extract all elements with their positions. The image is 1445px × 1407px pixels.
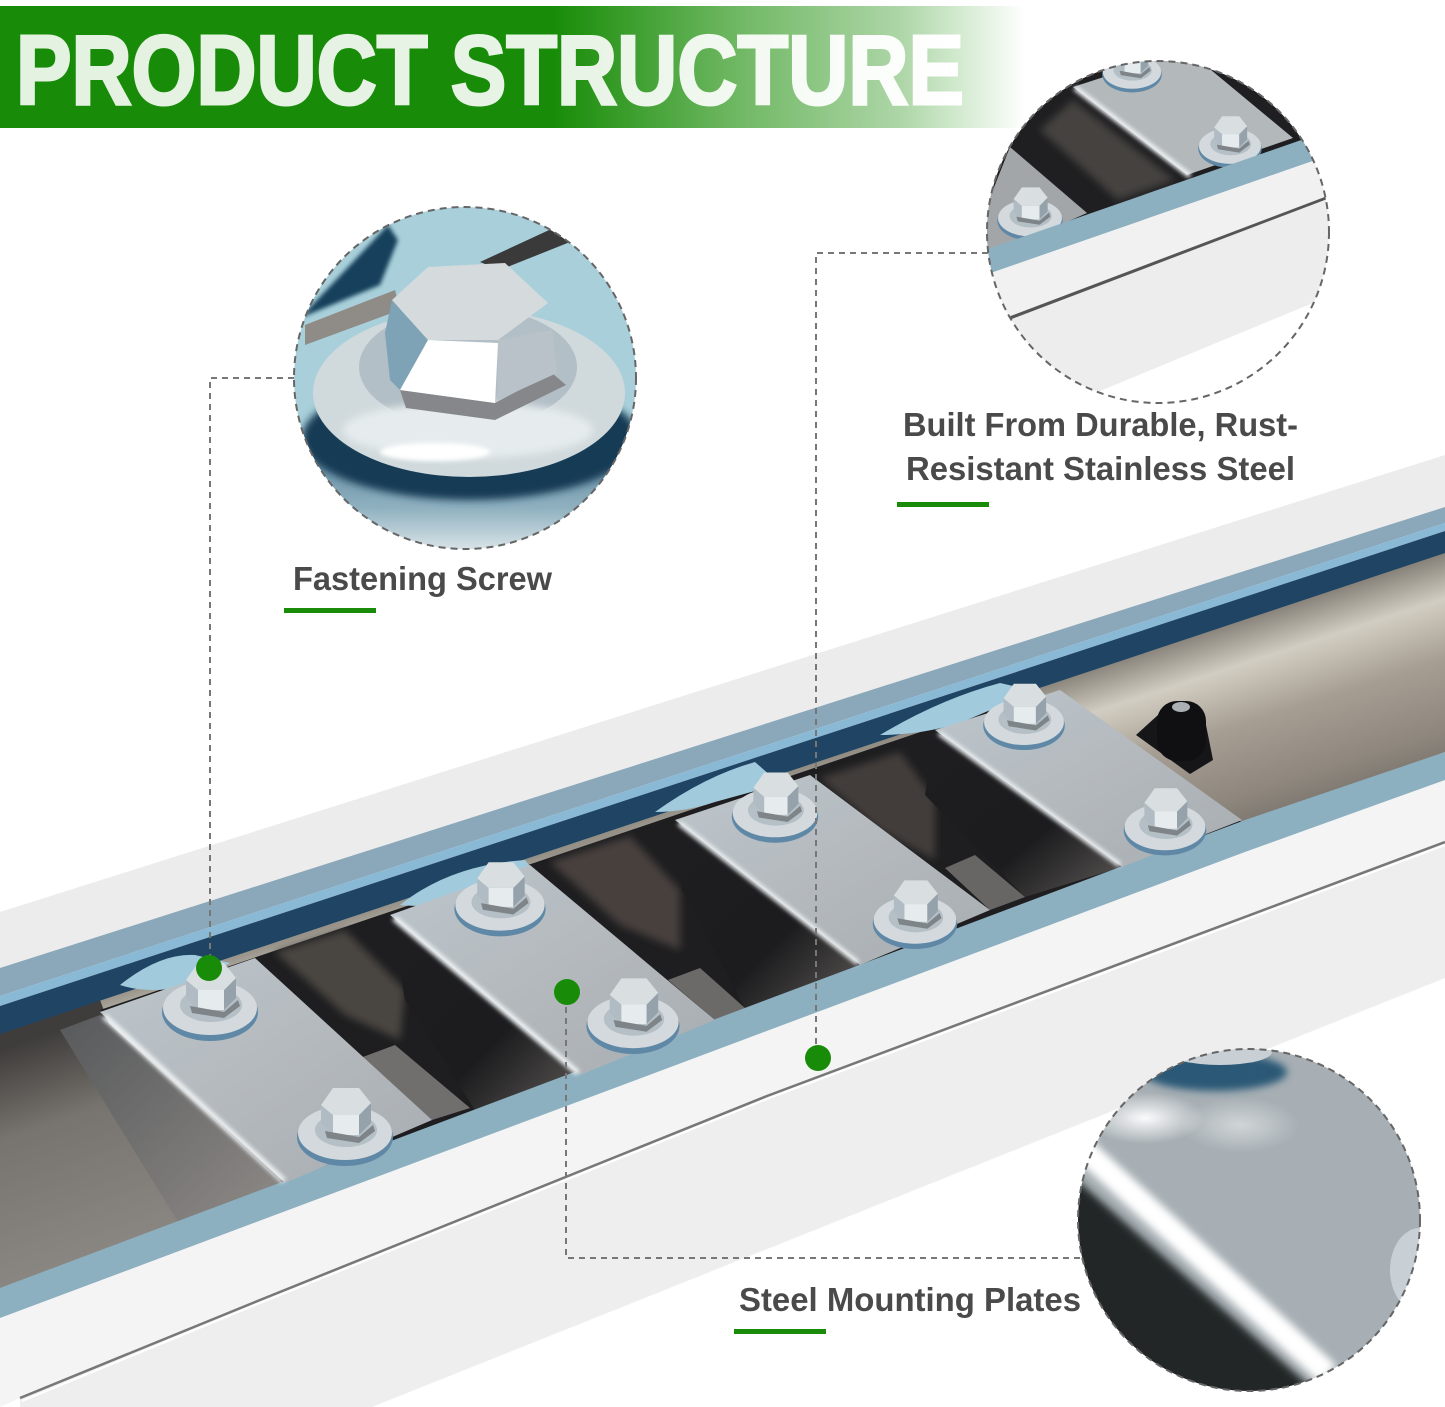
banner background <box>0 6 1025 128</box>
back wall glints <box>275 930 405 1040</box>
lower rail fold highlight <box>22 845 1445 1401</box>
blue upper rail lip <box>0 507 1445 1034</box>
detail circle: stainless steel rail <box>985 44 1330 410</box>
plate 3 <box>675 772 990 965</box>
upper rail flange <box>0 455 1445 972</box>
lower rail grey band <box>20 842 1445 1407</box>
label: stainless steel: Built From Durable, Rust- <box>903 406 1298 443</box>
rail product photo <box>0 455 1445 1407</box>
label: stainless steel <box>897 406 1298 507</box>
detail circle: fastening screw <box>290 205 640 555</box>
label: fastening screw <box>284 560 552 613</box>
lower rail body upper band <box>0 780 1445 1407</box>
label: steel mounting plates <box>734 1281 1081 1334</box>
plate 1 <box>100 958 432 1183</box>
tray interior <box>0 550 1445 1290</box>
plate 2 <box>390 862 715 1075</box>
blue lower rail lip <box>0 752 1445 1318</box>
label: fastening screw: Fastening Screw <box>293 560 552 597</box>
title: PRODUCT STRUCTURE <box>16 15 964 125</box>
label: steel mounting plates: Steel Mounting Plates <box>739 1281 1081 1318</box>
dashed leader: mounting plates <box>554 979 1080 1258</box>
dashed leader: fastening screw <box>196 378 294 981</box>
plate 4 <box>935 684 1242 867</box>
detail circle: steel mounting plate <box>1077 1048 1421 1392</box>
left tray interior <box>0 1000 185 1292</box>
floor strips <box>360 1045 470 1120</box>
lower rail fold line <box>20 842 1445 1398</box>
dark gaps between plates <box>100 705 1242 1190</box>
label: stainless steel: Resistant Stainless Steel <box>906 450 1295 487</box>
title banner <box>0 6 1025 128</box>
black rubber stud <box>1136 701 1213 774</box>
rail tabs <box>120 683 1035 990</box>
dashed leader: stainless steel <box>805 253 988 1071</box>
plate side skirts <box>60 1015 285 1222</box>
